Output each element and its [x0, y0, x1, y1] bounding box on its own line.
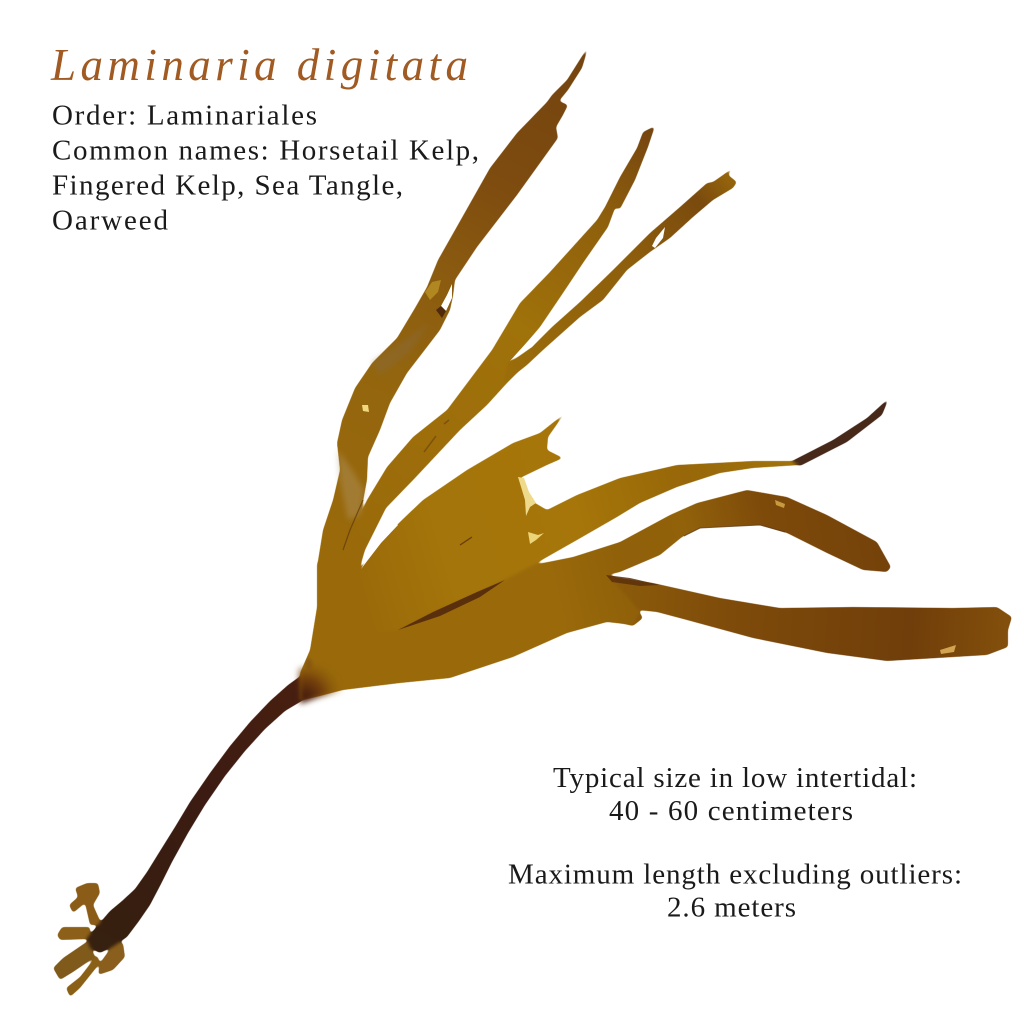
dark rim of frond 1 hole: [436, 306, 446, 318]
fleck highlight on frond 1: [362, 405, 369, 412]
frond 1: tallest: [317, 45, 589, 567]
base darkening: [298, 664, 344, 704]
holdfast: [53, 883, 125, 997]
size text block: 2.6 meters: [667, 892, 796, 924]
size text block: [508, 762, 962, 924]
slit between frond 2 and central blade: [361, 520, 398, 569]
notch crease on lower blade: [606, 575, 660, 586]
light mark on strap: [940, 645, 956, 654]
frond 6: long bottom strap: [607, 575, 1012, 661]
nodule: [306, 658, 312, 670]
size text block: 40 - 60 centimeters: [609, 795, 853, 827]
frond 4 dark tip: [792, 398, 889, 466]
size text block: Typical size in low intertidal:: [553, 762, 917, 794]
stipe: [87, 672, 324, 953]
frond 5 and lower blade: [300, 490, 891, 700]
dark split between fronds: [398, 580, 505, 630]
hole in frond 1: [441, 284, 452, 311]
slit between frond 2 and frond 3: [510, 325, 552, 361]
blade base fill: [300, 560, 398, 700]
frond 2: [342, 126, 655, 574]
size text block: Maximum length excluding outliers:: [508, 858, 962, 890]
frond 4: central broad blade: [358, 409, 800, 640]
crease on frond 2: [424, 420, 449, 452]
taxonomy text block: Order: Laminariales: [52, 100, 317, 132]
taxonomy text block: Oarweed: [52, 204, 168, 236]
frond 3: [503, 166, 737, 384]
details: splits, folds and glossy highlights: [298, 227, 956, 704]
crease on frond 1: [343, 500, 363, 550]
title: Laminaria digitata: [50, 40, 468, 90]
highlight at tear in frond 4: [518, 477, 536, 516]
taxonomy text block: Fingered Kelp, Sea Tangle,: [52, 170, 403, 202]
gloss patch: [528, 532, 544, 544]
brown fold on frond 1: [372, 322, 430, 375]
dark fleck: [460, 537, 472, 545]
dark rim of frond 5 underside: [684, 525, 785, 536]
taxonomy text block: Common names: Horsetail Kelp,: [52, 134, 479, 166]
light mark on frond 5: [775, 500, 785, 508]
gloss on frond 1: [425, 280, 441, 300]
hole in frond 3: [652, 227, 665, 248]
taxonomy text block: [52, 100, 479, 236]
light fold on frond 1: [338, 450, 364, 520]
